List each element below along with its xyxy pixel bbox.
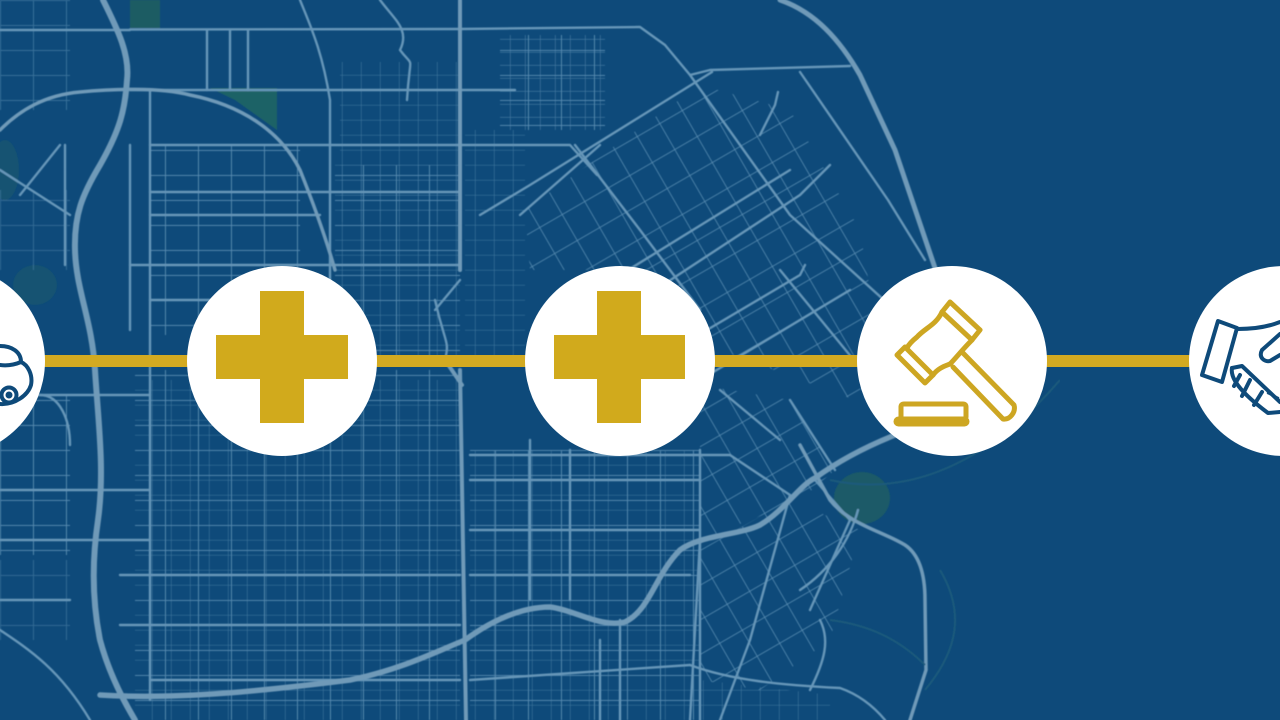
icon: handshake xyxy=(1202,321,1280,413)
timeline node: handshake (cropped) xyxy=(1189,266,1280,456)
timeline node: gavel xyxy=(857,266,1047,456)
timeline node: car (cropped) xyxy=(0,266,45,456)
connector line: gavel to handshake xyxy=(1045,355,1193,367)
icon: cross xyxy=(216,291,348,423)
park patches xyxy=(0,0,890,524)
timeline node: second medical cross xyxy=(525,266,715,456)
timeline node: first medical cross xyxy=(187,266,377,456)
street grids xyxy=(0,0,880,720)
icon: cross xyxy=(554,291,685,423)
water tint lines xyxy=(830,380,1060,690)
connector line: second cross to gavel xyxy=(712,355,860,367)
icon: car xyxy=(0,346,31,404)
highways xyxy=(0,0,935,720)
connector line: first cross to second cross xyxy=(375,355,527,367)
icon: gavel xyxy=(896,302,1014,424)
main streets xyxy=(0,0,925,720)
connector line: car to first cross xyxy=(40,355,190,367)
